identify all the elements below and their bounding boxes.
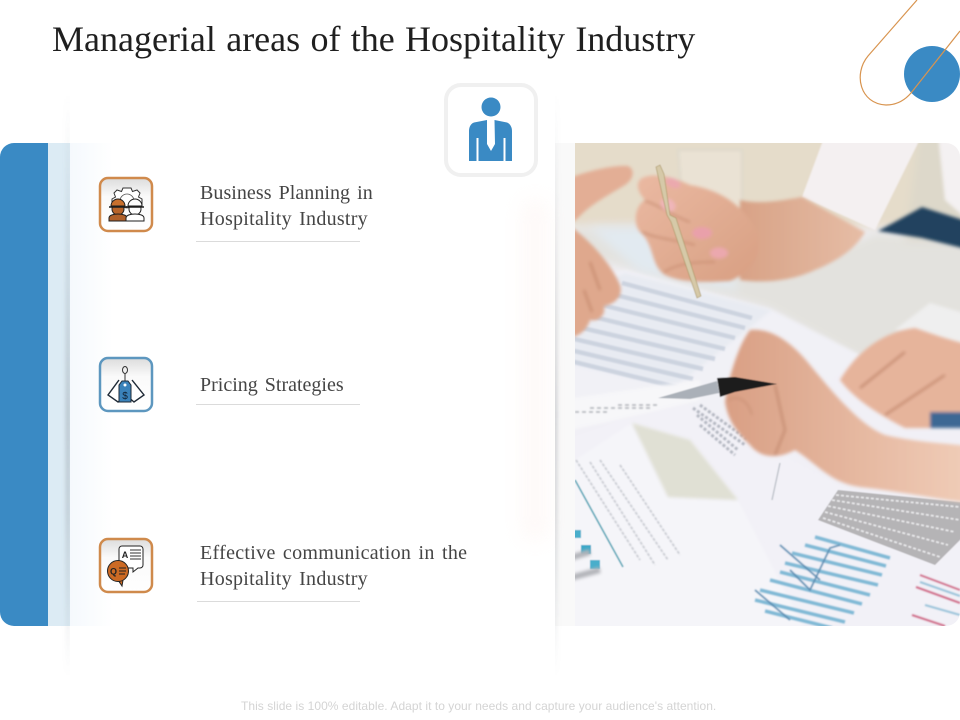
glass bbox=[682, 153, 740, 204]
left hand bbox=[570, 166, 633, 337]
item dividers bbox=[196, 242, 360, 602]
lined document bbox=[575, 278, 858, 386]
icon tile: question and answer bubbles: Q bbox=[110, 566, 117, 576]
icon tile: engineers with gear bbox=[100, 178, 152, 231]
icon tile: price tag bbox=[100, 358, 152, 411]
shirt bbox=[802, 143, 918, 230]
black pen bbox=[658, 377, 777, 399]
icon tile: question and answer bubbles bbox=[100, 539, 152, 592]
photo background bbox=[575, 228, 960, 500]
icon: businessman bbox=[469, 98, 512, 161]
footer note: This slide is 100% editable. Adapt it to your needs and capture your audience's attention. bbox=[241, 699, 716, 713]
right hand bbox=[840, 328, 960, 428]
bar chart bbox=[755, 537, 890, 628]
central white panel bbox=[66, 95, 575, 675]
decoration: outlined capsule and blue circle bbox=[860, 0, 960, 105]
lower papers bbox=[560, 380, 960, 640]
icon tile: question and answer bubbles: A bbox=[122, 550, 129, 560]
text: effective communication bbox=[200, 542, 467, 590]
table sheet right bbox=[898, 304, 960, 342]
text scatter bbox=[575, 405, 660, 412]
text: business planning: Hospitality Industry bbox=[200, 208, 368, 230]
chair bbox=[878, 207, 960, 250]
text: business planning: Business Planning in bbox=[200, 182, 373, 204]
left document bbox=[575, 480, 623, 567]
text: effective communication: Effective communication in the bbox=[200, 542, 467, 564]
left blue bar bbox=[0, 143, 48, 626]
pink mini charts bbox=[912, 575, 960, 626]
icon tile: price tag: $ bbox=[122, 391, 128, 402]
data table bbox=[818, 490, 960, 565]
arm with pen bbox=[636, 176, 865, 282]
text: business planning bbox=[200, 182, 373, 230]
gold pen bbox=[656, 165, 701, 298]
title: Managerial areas of the Hospitality Industry bbox=[52, 19, 695, 59]
text: effective communication: Hospitality Industry bbox=[200, 568, 368, 590]
pale blue band bbox=[48, 143, 70, 626]
lower hand with pen bbox=[725, 330, 960, 503]
text: pricing strategies: Pricing Strategies bbox=[200, 374, 344, 396]
icon tile: businessman bbox=[446, 85, 536, 175]
photo: business documents on a table bbox=[560, 130, 960, 640]
